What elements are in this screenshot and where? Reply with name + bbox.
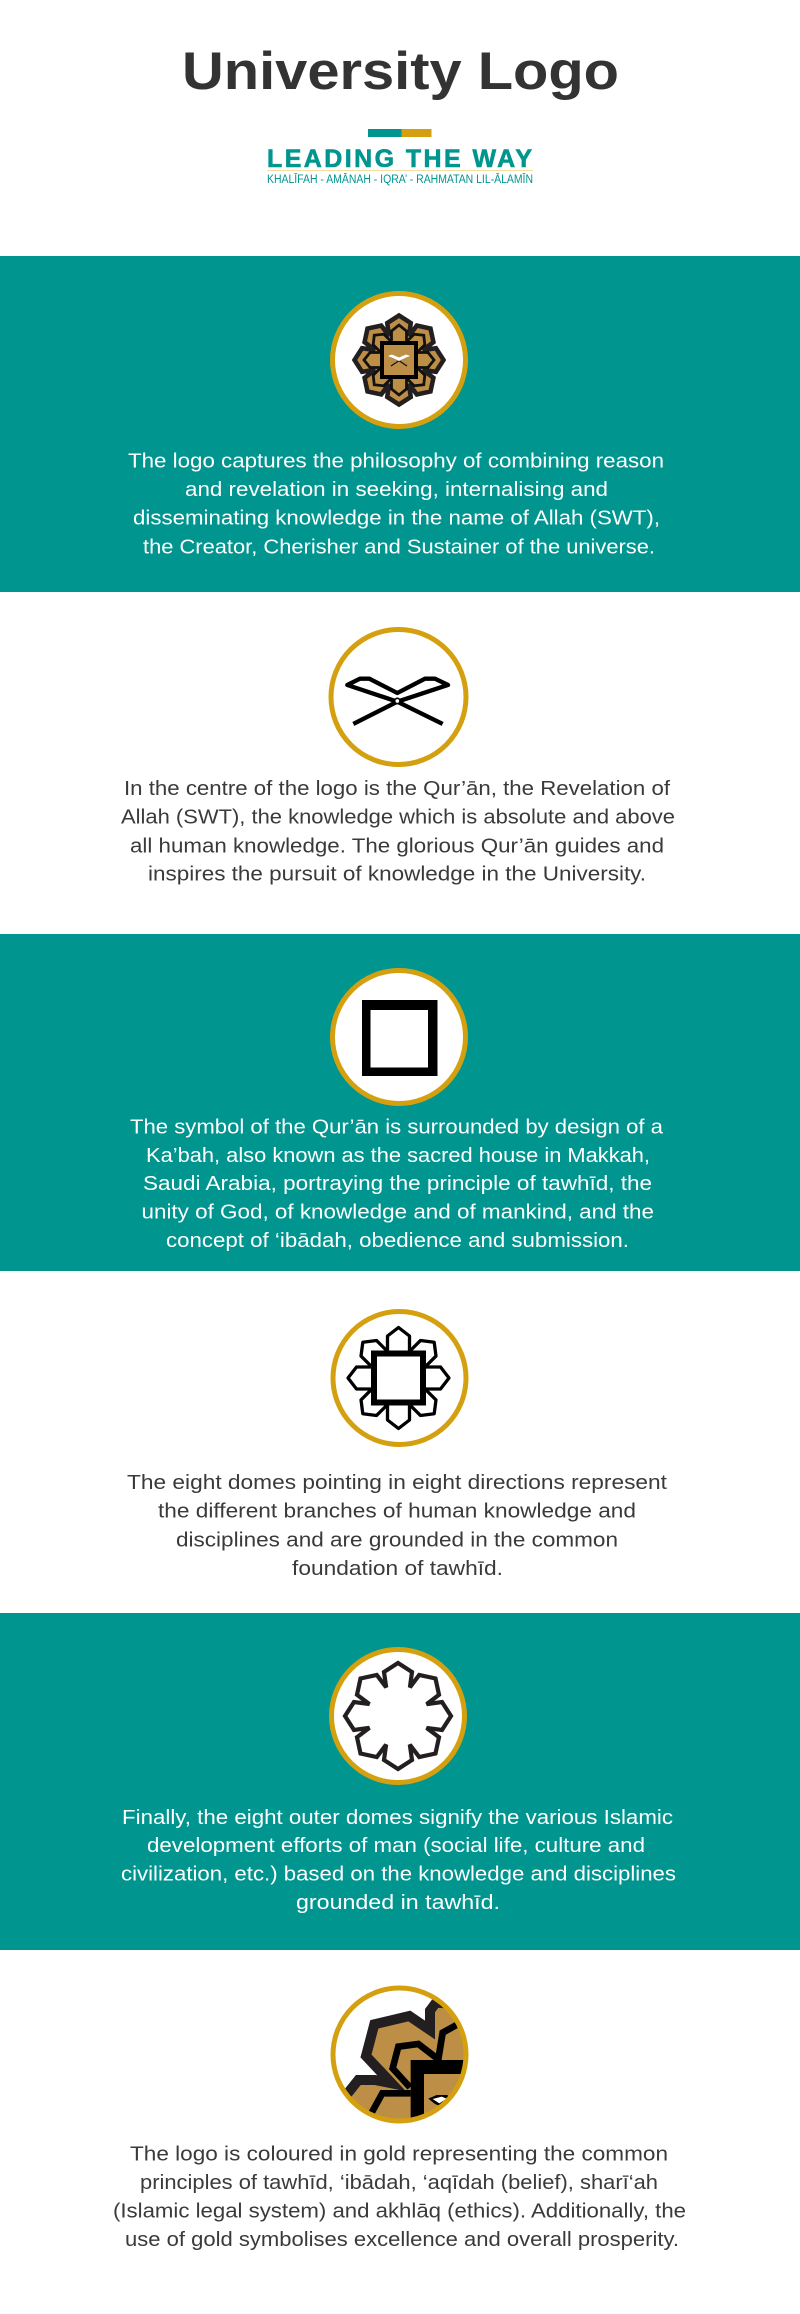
panel: eight outer domes [0, 1613, 800, 1950]
text block: disciplines and are grounded in the common [176, 1528, 618, 1552]
icon: gold logo close-up [330, 1986, 468, 2124]
text block [127, 1471, 667, 1580]
text block: The logo captures the philosophy of combining reason [128, 449, 664, 472]
text block: Ka’bah, also known as the sacred house in Makkah, [146, 1144, 650, 1167]
text block: In the centre of the logo is the Qur’ān, the Revelation of [124, 777, 670, 800]
text block [130, 1115, 664, 1252]
text block: Allah (SWT), the knowledge which is absolute and above [121, 806, 675, 828]
text block: the Creator, Cherisher and Sustainer of the universe. [143, 535, 655, 558]
tagline logo: KHALĪFAH - AMĀNAH - IQRA’ - RAHMATAN LIL-ĀLAMĪN [267, 174, 533, 186]
text block: grounded in tawhīd. [296, 1891, 500, 1914]
text block: and revelation in seeking, internalising and [185, 478, 608, 501]
text block: Finally, the eight outer domes signify the various Islamic [122, 1806, 673, 1829]
text block: inspires the pursuit of knowledge in the University. [148, 863, 646, 886]
text block: foundation of tawhīd. [292, 1557, 503, 1580]
text block [113, 2142, 686, 2251]
text block: disseminating knowledge in the name of Allah (SWT), [133, 506, 660, 530]
text block [121, 1806, 676, 1914]
icon: full logo [332, 294, 466, 426]
text block: (Islamic legal system) and akhlāq (ethics). Additionally, the [113, 2200, 686, 2222]
panel: logo overview [0, 256, 800, 592]
band [0, 1613, 800, 1950]
text block: The symbol of the Qur’ān is surrounded by design of a [130, 1115, 664, 1138]
text block [128, 449, 664, 558]
panel: eight inner domes [127, 1312, 667, 1580]
text block [121, 777, 675, 886]
text block: The logo is coloured in gold representing the common [130, 2142, 668, 2166]
tagline logo: LEADING THE WAY [267, 145, 532, 173]
band [0, 256, 800, 592]
tagline logo [267, 145, 533, 186]
text block: civilization, etc.) based on the knowledge and disciplines [121, 1863, 676, 1886]
text block: all human knowledge. The glorious Qur’ān guides and [130, 834, 664, 857]
text block: The eight domes pointing in eight directions represent [127, 1471, 667, 1494]
text block: Saudi Arabia, portraying the principle of tawhīd, the [143, 1172, 652, 1195]
title: University Logo [182, 42, 619, 101]
text block: the different branches of human knowledge and [158, 1500, 636, 1523]
icon: outer dome outline [332, 1650, 464, 1782]
text block: development efforts of man (social life, culture and [147, 1834, 645, 1857]
header [182, 42, 619, 186]
panel: gold colour [113, 1988, 686, 2251]
text block: concept of ‘ibādah, obedience and submission. [166, 1229, 629, 1252]
band [0, 934, 800, 1271]
icon: Kaaba square [332, 970, 466, 1104]
accent bar [368, 129, 432, 137]
text block: use of gold symbolises excellence and overall prosperity. [125, 2228, 679, 2251]
icon: open Quran [331, 630, 466, 764]
panel: Quran [121, 630, 675, 886]
panel: Kaaba [0, 934, 800, 1271]
icon: eight domes with square [333, 1312, 466, 1444]
text block: unity of God, of knowledge and of mankind, and the [142, 1201, 654, 1224]
text block: principles of tawhīd, ‘ibādah, ‘aqīdah (belief), sharī‘ah [140, 2171, 658, 2194]
